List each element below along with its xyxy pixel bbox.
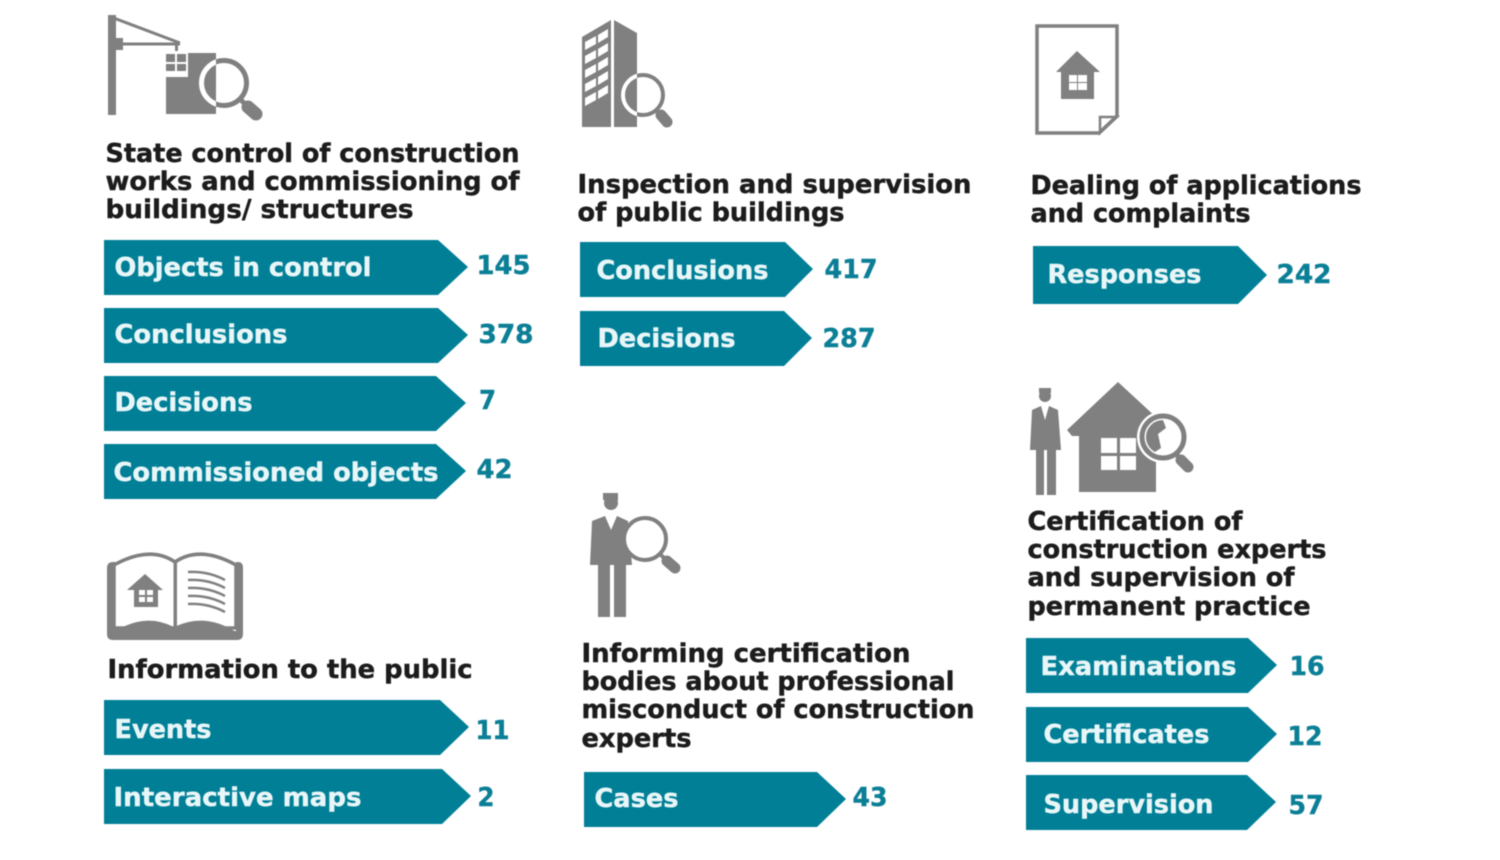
bar: certificates: Certificates — [1044, 720, 1210, 750]
bar: conclusions: 417 — [824, 255, 878, 285]
bar: commissioned objects: Commissioned objects — [114, 458, 438, 488]
bar: cases: Cases — [594, 784, 678, 814]
bar: conclusions: 378 — [478, 320, 534, 350]
bar: commissioned objects: 42 — [476, 455, 512, 485]
bar: decisions — [580, 311, 876, 366]
heading: applications: and complaints — [1030, 199, 1250, 229]
bar: supervision — [1026, 775, 1324, 830]
heading: informing: Informing certification — [582, 639, 910, 669]
bar: responses: Responses — [1048, 260, 1202, 290]
bar: conclusions — [580, 242, 878, 297]
icon: expert with magnifier — [590, 493, 675, 617]
bar: supervision: Supervision — [1044, 790, 1214, 820]
bar: conclusions — [104, 308, 534, 363]
heading: informing: bodies about professional — [582, 667, 954, 697]
bar: commissioned objects — [104, 444, 512, 499]
heading: certification: Certification of — [1028, 507, 1243, 537]
icon: document with house — [1037, 26, 1117, 133]
bar: conclusions: Conclusions — [114, 320, 288, 350]
bar: decisions: 287 — [822, 324, 876, 354]
heading: certification: permanent practice — [1028, 592, 1310, 622]
panel: inspection and supervision — [578, 20, 972, 366]
panel: information to the public — [104, 554, 510, 824]
bar: examinations: 16 — [1290, 652, 1324, 682]
heading: inspection — [578, 170, 972, 228]
panel: informing certification bodies — [582, 493, 974, 827]
bar: events — [104, 700, 510, 755]
bar: examinations: Examinations — [1040, 652, 1236, 682]
panel: applications and complaints — [1030, 26, 1362, 304]
heading: applications — [1030, 171, 1362, 229]
bar: decisions: Decisions — [114, 388, 252, 418]
bar: supervision: 57 — [1288, 791, 1324, 821]
heading: inspection: Inspection and supervision — [578, 170, 972, 200]
bar: interactive maps: Interactive maps — [114, 783, 362, 813]
bar: cases: 43 — [852, 783, 888, 813]
heading: state control: State control of construction — [106, 139, 520, 169]
icon: crane and building with magnifier — [108, 15, 256, 115]
bar: conclusions: Conclusions — [596, 256, 768, 286]
bar: events: 11 — [476, 716, 510, 746]
heading: state control — [106, 139, 520, 225]
heading: state control: buildings/ structures — [106, 195, 414, 225]
bar: cases — [584, 772, 888, 827]
bar: certificates — [1026, 707, 1322, 762]
bar: objects in control: Objects in control — [114, 253, 372, 283]
bar: certificates: 12 — [1288, 722, 1322, 752]
bar: objects in control — [104, 240, 530, 295]
bar: events: Events — [114, 715, 212, 745]
bar: decisions: 7 — [479, 386, 496, 416]
bar: decisions — [104, 376, 496, 431]
icon: office tower with magnifier — [582, 20, 667, 127]
heading: information: Information to the public — [108, 655, 472, 685]
bar: interactive maps — [104, 769, 494, 824]
heading: certification: construction experts — [1028, 535, 1326, 565]
heading: certification — [1028, 507, 1326, 622]
bar: interactive maps: 2 — [478, 783, 494, 813]
heading: informing: experts — [582, 724, 692, 754]
heading: state control: works and commissioning of — [106, 167, 520, 197]
bar: examinations — [1026, 638, 1324, 693]
heading: informing — [582, 639, 974, 754]
bar: objects in control: 145 — [476, 251, 530, 281]
heading: informing: misconduct of construction — [582, 695, 974, 725]
bar: decisions: Decisions — [598, 324, 736, 354]
heading: applications: Dealing of applications — [1030, 171, 1362, 201]
heading: inspection: of public buildings — [578, 198, 844, 228]
heading: certification: and supervision of — [1028, 563, 1295, 593]
icon: open book with house — [107, 554, 243, 640]
bar: responses — [1033, 246, 1332, 304]
panel: certification — [1026, 382, 1326, 830]
icon: expert, house and magnifier — [1030, 382, 1189, 495]
panel: state control — [104, 15, 534, 499]
bar: responses: 242 — [1276, 260, 1332, 290]
